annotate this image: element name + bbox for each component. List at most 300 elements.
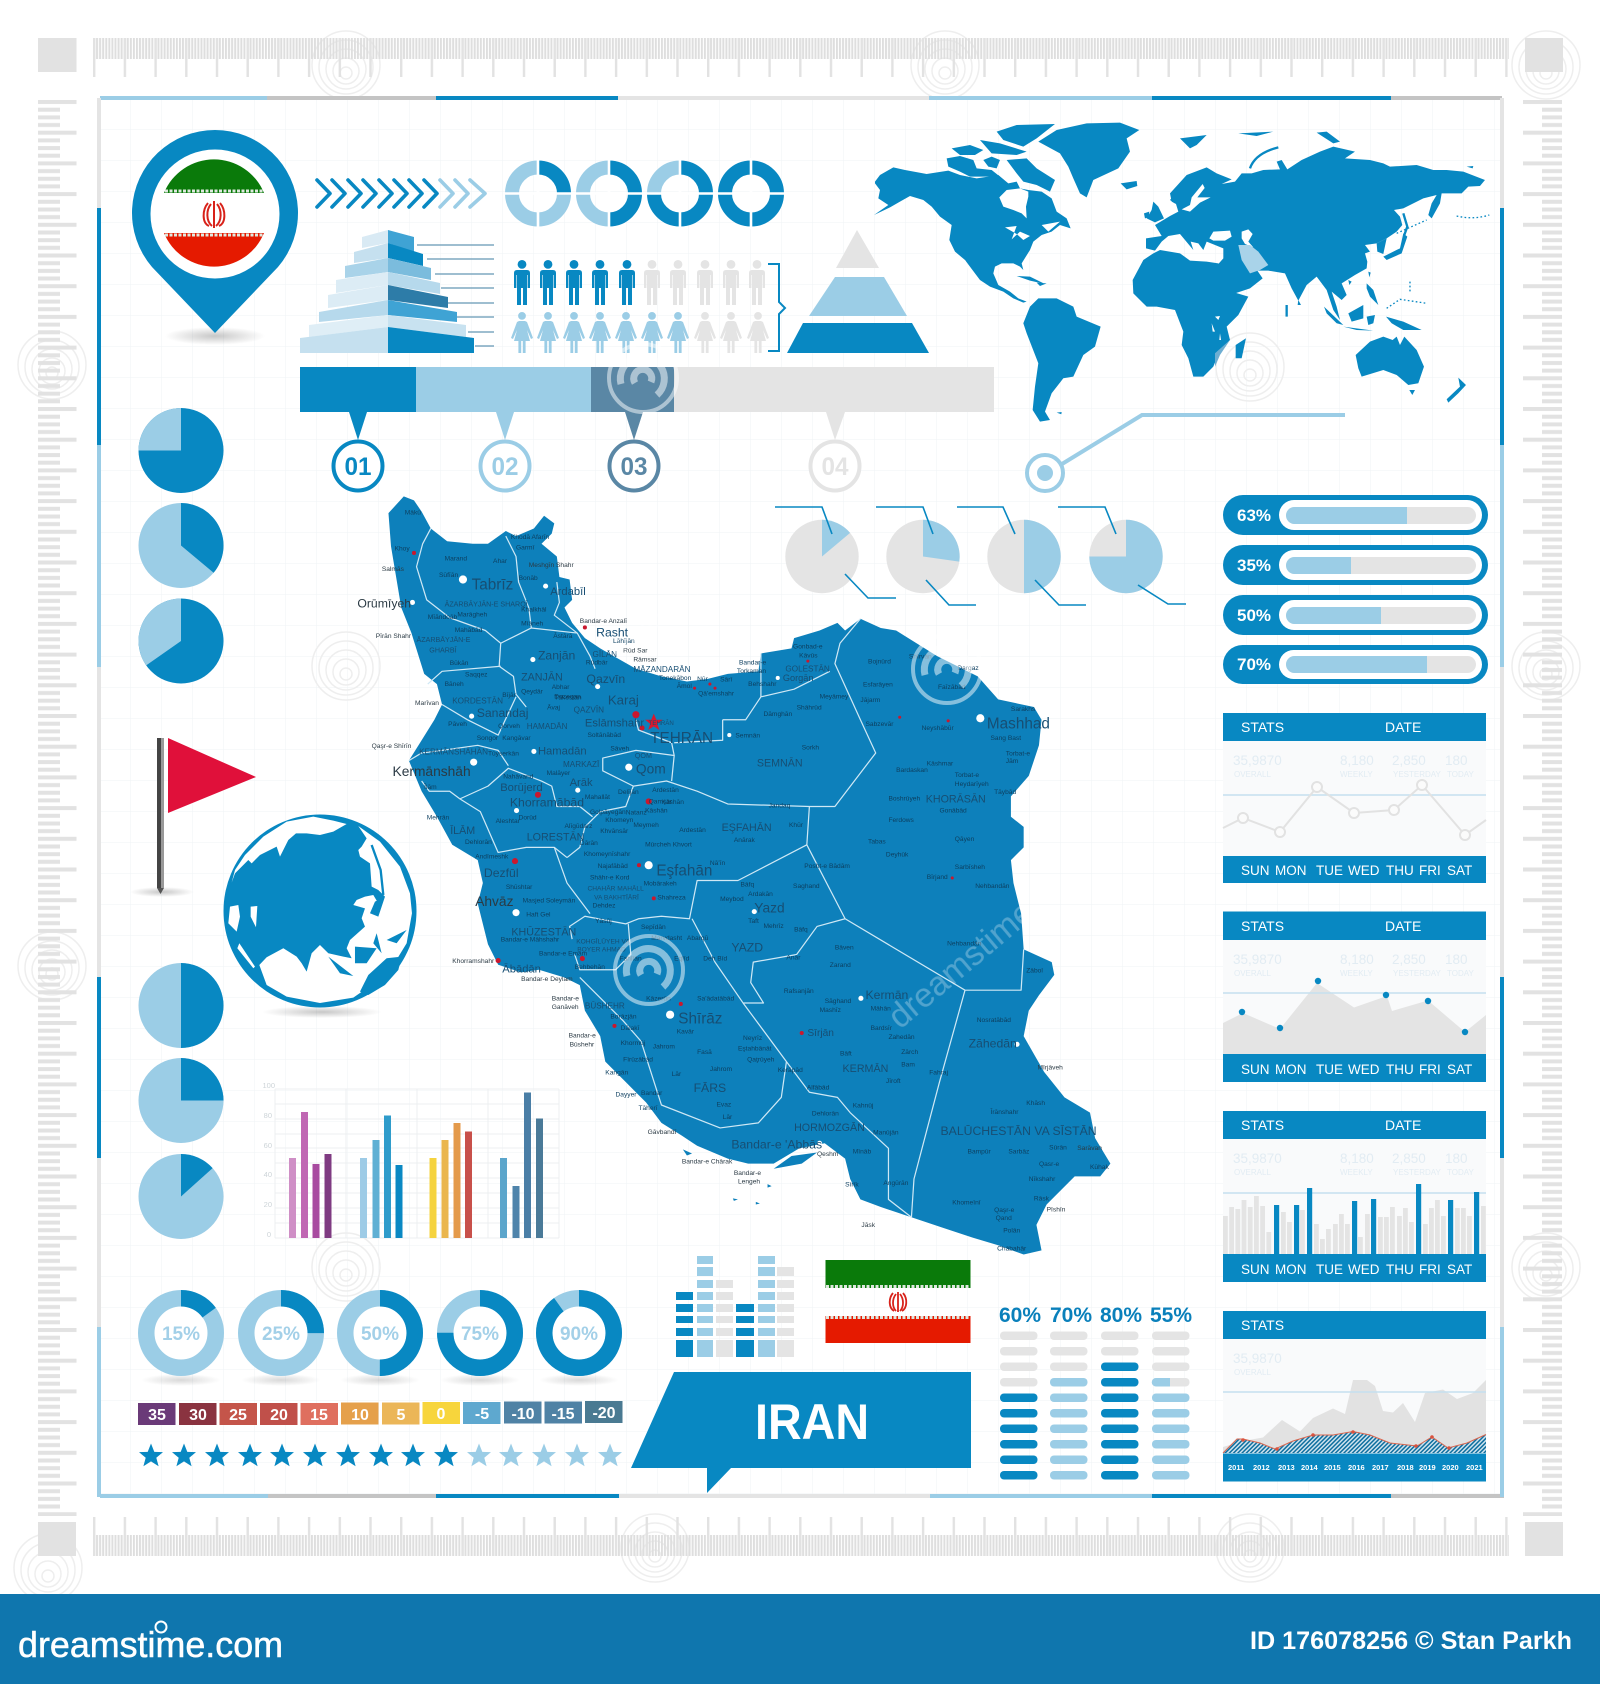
stats panel 2: area chart: TUE <box>1316 1062 1343 1077</box>
small town labels: Āmol <box>677 682 692 690</box>
small town labels: Kerāpād <box>778 1067 803 1074</box>
province labels: QOM <box>635 752 652 760</box>
small town labels: Khāsh <box>1026 1100 1045 1107</box>
small town labels: Dorūd <box>519 814 537 821</box>
city labels outside the map: Mīrjāveh <box>1037 1064 1063 1071</box>
small town labels: Marand <box>445 556 467 563</box>
city labels outside the map <box>357 562 1102 1229</box>
small town labels: Sarbāz <box>1008 1148 1029 1155</box>
small town labels: Qāyen <box>955 836 975 843</box>
temperature scale chips: 0 <box>437 1406 446 1423</box>
province labels: ĀZARBĀYJĀN-E SHARQĪ <box>445 601 528 609</box>
small town labels: Pāveh <box>448 721 467 728</box>
small town labels: Jahrom <box>710 1066 732 1073</box>
stats panel 4: yearly area chart: 2012 <box>1253 1463 1270 1472</box>
seas <box>1182 184 1253 340</box>
major city labels: Hamadān <box>538 745 587 757</box>
small town labels: Songor <box>477 735 499 742</box>
stats panel 1: line chart: SUN <box>1241 863 1270 878</box>
small town labels: Dālakī <box>621 1025 640 1032</box>
small town labels: Sūrān <box>1049 1144 1067 1151</box>
small town labels: Sarbīsheh <box>955 864 985 871</box>
target callout line <box>1027 415 1345 491</box>
city labels outside the map: Bandar-e Deylam <box>521 976 573 983</box>
cities: white dots <box>410 575 1020 1146</box>
small town labels: Zarand <box>830 962 851 969</box>
small town labels: Bandar-e <box>739 660 767 667</box>
stats panel 2: area chart: THU <box>1386 1062 1414 1077</box>
city labels outside the map: Rūd Sar <box>623 647 648 654</box>
small town labels: Marvdasht <box>651 935 682 942</box>
city labels outside the map: Orūmīyeh <box>357 597 411 611</box>
stats panel 1: line chart: WEEKLY <box>1340 770 1373 779</box>
province labels: ZANJĀN <box>521 672 563 684</box>
city labels outside the map: Marīvan <box>415 700 439 707</box>
south america <box>1023 298 1101 422</box>
small town labels: Angūrān <box>883 1180 909 1187</box>
small town labels: Qeydār <box>521 688 544 695</box>
major city labels: Zāhedān <box>969 1036 1017 1050</box>
major city labels: Gorgān <box>783 673 813 683</box>
small town labels: Khomeyn <box>605 817 634 824</box>
small town labels: Khormūj <box>621 1040 646 1047</box>
small town labels: Khūr <box>789 822 804 829</box>
greenland <box>1038 123 1139 197</box>
city labels outside the map: Pīshīn <box>1047 1207 1066 1214</box>
stats panel 4: yearly area chart <box>1223 1311 1486 1482</box>
stats panel 3: bar chart: TODAY <box>1447 1168 1474 1177</box>
small town labels: Anārak <box>734 837 756 844</box>
stats panel 1: line chart: 35,9870 <box>1233 753 1282 768</box>
small town labels: Boshrūyeh <box>888 795 920 802</box>
temperature scale chips: -15 <box>551 1406 575 1423</box>
small town labels: Zābol <box>1026 967 1043 974</box>
stats panel 4: yearly area chart: OVERALL <box>1234 1368 1271 1377</box>
city labels outside the map: Kermānshāh <box>393 764 471 779</box>
stats panel 1: line chart: OVERALL <box>1234 770 1271 779</box>
stats panel 1: line chart: WED <box>1348 863 1380 878</box>
stats panel 3: bar chart: 180 <box>1445 1151 1468 1166</box>
stats panel 3: bar chart: MON <box>1275 1262 1306 1277</box>
small town labels: Ferdows <box>888 817 915 824</box>
column chart: 40 <box>264 1170 272 1179</box>
small town labels: Dayyer <box>616 1091 637 1098</box>
hudson bay and lakes <box>964 188 1060 275</box>
small town labels: Mīāndoāb <box>428 614 458 621</box>
australia and islands <box>360 957 402 995</box>
province labels: HAMADĀN <box>527 721 568 731</box>
province labels: KORDESTĀN <box>452 695 503 705</box>
stats panel 1: line chart: TODAY <box>1447 770 1474 779</box>
small town labels: Ardestān <box>652 787 679 794</box>
major city labels: Qazvīn <box>586 672 625 686</box>
major city labels: Sīrjān <box>807 1028 834 1039</box>
major city labels: Rasht <box>596 626 629 640</box>
arctic ocean <box>232 817 347 883</box>
stats panel 2: area chart: SAT <box>1447 1062 1472 1077</box>
stats panel 3: bar chart <box>1223 1111 1486 1282</box>
small town labels: Bāneh <box>445 681 464 688</box>
small town labels: Mehrīz <box>763 923 784 930</box>
province labels: QAZVĪN <box>574 705 604 715</box>
small town labels: Eqlīd <box>674 956 690 963</box>
small town labels: Tāherī <box>638 1105 658 1112</box>
small town labels: Mehrān <box>427 814 450 821</box>
city labels outside the map: Qaşr-e Shīrīn <box>372 743 412 750</box>
small town labels: Lār <box>672 1071 682 1078</box>
city labels outside the map: Salmās <box>382 566 405 573</box>
stats panel 2: area chart: 180 <box>1445 952 1468 967</box>
major city labels: Eslāmshahr <box>585 717 644 729</box>
small town labels: Sabzevār <box>866 721 894 728</box>
stats panel 1: line chart: MON <box>1275 863 1306 878</box>
small town labels: Yāsūj <box>595 918 612 925</box>
small town labels: Meymeh <box>633 822 659 829</box>
stats panel 3: bar chart: DATE <box>1385 1117 1421 1133</box>
percentage donuts: 15% <box>162 1324 200 1345</box>
small town labels: Mīāneh <box>521 620 544 627</box>
small town labels: Jahrom <box>653 1043 675 1050</box>
stats panel 4: yearly area chart: 2011 <box>1228 1463 1244 1472</box>
stats panel 3: bar chart: YESTERDAY <box>1393 1168 1442 1177</box>
temperature scale chips: -10 <box>511 1406 535 1423</box>
small town labels: Fahlīān <box>620 956 642 963</box>
small town labels: Zahedān <box>888 1034 915 1041</box>
small town labels: Dargaz <box>957 665 979 672</box>
marker 02: 02 <box>492 453 518 481</box>
small town labels: Andīmeshk <box>475 854 509 861</box>
small town labels: Heydarīyeh <box>955 781 989 788</box>
stats panel 4: yearly area chart: 2017 <box>1372 1463 1389 1472</box>
major city labels: Tabrīz <box>472 577 513 594</box>
small town labels: Dāmghān <box>763 711 793 718</box>
mini pie charts with leaders <box>775 507 1186 605</box>
pyramid leader lines <box>417 245 494 346</box>
progress pills <box>1223 495 1488 684</box>
major city labels: Zanjān <box>538 649 576 663</box>
watermark overlays <box>607 344 1041 1036</box>
city labels outside the map: Khorramshahr <box>452 958 495 965</box>
city labels outside the map: Bandar-e Anzalī <box>580 618 627 625</box>
city labels outside the map: Būshehr <box>570 1041 595 1048</box>
small town labels: Qorveh <box>498 723 520 730</box>
small town labels: Behbehān <box>575 964 605 971</box>
triangle pyramid <box>787 230 929 353</box>
stats panel 1: line chart: 180 <box>1445 753 1468 768</box>
right ruler <box>1523 100 1562 1516</box>
temperature scale chips <box>138 1401 622 1425</box>
province labels: MARKAZĪ <box>563 759 600 769</box>
stats panel 4: yearly area chart: 2016 <box>1348 1463 1365 1472</box>
temperature scale chips: 15 <box>310 1407 328 1424</box>
stats panel 3: bar chart: STATS <box>1241 1117 1284 1133</box>
small town labels: Sarakhs <box>1011 706 1036 713</box>
small town labels: Qand <box>996 1215 1012 1222</box>
small town labels: Būkān <box>450 660 469 667</box>
stats panel 1: line chart: FRI <box>1419 863 1441 878</box>
small town labels: Ahar <box>493 558 508 565</box>
small town labels: Bījār <box>502 692 517 699</box>
stats panel 4: yearly area chart: 2020 <box>1442 1463 1459 1472</box>
province labels: MĀZANDARĀN <box>633 664 691 674</box>
people icons <box>511 260 785 353</box>
temperature scale chips: 35 <box>148 1407 166 1424</box>
frame border <box>97 96 1504 1498</box>
small town labels: Nosratābād <box>977 1017 1011 1024</box>
province labels: KERMĀNSHĀHĀN <box>419 746 488 756</box>
watermark overlays: dreamstime <box>607 563 720 665</box>
small town labels: Alīgūdarz <box>564 823 592 830</box>
small town labels: Abhar <box>552 684 570 691</box>
small town labels: Jām <box>1006 758 1019 765</box>
temperature scale chips: 25 <box>229 1407 247 1424</box>
chevron arrows <box>317 180 485 207</box>
province borders <box>409 528 1024 1217</box>
small town labels: Īrānshahr <box>991 1108 1019 1116</box>
major city labels <box>472 577 1050 1151</box>
stats panel 1: line chart: DATE <box>1385 719 1421 735</box>
mozambique tint <box>1215 340 1230 367</box>
column chart <box>262 1081 559 1239</box>
small town labels: Dehlorān <box>465 839 492 846</box>
stats panel 4: yearly area chart: 2018 <box>1397 1463 1414 1472</box>
province labels: KHŪZESTĀN <box>511 927 576 939</box>
small town labels: Behshahr <box>748 681 777 688</box>
small town labels: Jandaq <box>769 803 791 810</box>
small town labels: Polān <box>1003 1228 1021 1235</box>
small town labels: Dozeqan <box>554 693 581 700</box>
small town labels: Kāzerūn <box>646 995 671 1002</box>
province labels: GOLESTĀN <box>785 663 830 673</box>
small town labels: Bāfq <box>794 927 808 934</box>
small town labels: Mashīz <box>820 1007 841 1014</box>
icon: flag emblem small <box>890 1292 906 1312</box>
city labels outside the map: Rāmsar <box>633 657 657 664</box>
small town labels: Manūjān <box>873 1130 899 1137</box>
small town labels: Posht-e Bādām <box>804 863 850 870</box>
small town labels: Masjed Soleymān <box>523 897 576 904</box>
temperature scale chips: -20 <box>592 1405 616 1422</box>
stats panel 2: area chart: 2,850 <box>1392 952 1426 967</box>
pill 63% <box>1223 495 1488 535</box>
footer bar <box>0 1594 1600 1684</box>
stats panel 4: yearly area chart: 35,9870 <box>1233 1351 1282 1366</box>
province labels <box>417 601 1097 1138</box>
small town labels: Ardestān <box>679 827 706 834</box>
city labels outside the map: Ganāveh <box>552 1004 579 1011</box>
small town labels: Meyāmey <box>820 693 849 700</box>
small town labels: Kāshān <box>661 799 684 806</box>
column chart: 60 <box>264 1141 272 1150</box>
background grid panel <box>100 99 1501 1495</box>
small town labels: Sārī <box>720 677 732 684</box>
small town labels: Qaşr-e <box>994 1207 1015 1214</box>
iceland <box>1121 181 1137 189</box>
small town labels: Natanz <box>626 810 647 817</box>
small town labels: Khalkhāl <box>521 607 547 614</box>
six pie charts on the left <box>138 408 224 1239</box>
province labels: BALŪCHESTĀN VA SĪSTĀN <box>941 1124 1097 1138</box>
marker 01 <box>334 442 382 490</box>
iran title banner: IRAN <box>755 1394 869 1450</box>
small town labels: Khomeīnī <box>952 1199 981 1206</box>
percentage donuts: 50% <box>361 1324 399 1345</box>
left ruler <box>38 100 77 1516</box>
temperature scale chips: -5 <box>475 1406 489 1423</box>
small town labels: Lāhījān <box>613 638 635 645</box>
small town labels: Bardaskan <box>896 767 928 774</box>
small town labels: Kāshān <box>645 808 668 815</box>
small town labels: Kangāvar <box>502 735 531 742</box>
province labels: FĀRS <box>694 1081 726 1095</box>
city labels outside the map: Bandar-e <box>552 995 579 1002</box>
small town labels: Kūhak <box>1090 1164 1109 1171</box>
small town labels: Saghand <box>793 883 820 890</box>
globe <box>224 814 416 1018</box>
small town labels: Sūfīān <box>439 572 458 579</box>
percentage donuts: 25% <box>262 1324 300 1345</box>
iran map <box>357 496 1110 1254</box>
small town labels: Eştahbānāt <box>738 1045 772 1052</box>
star rating row <box>139 1444 622 1466</box>
small town labels: Māhān <box>871 1006 891 1013</box>
small town labels: Āstārā <box>553 632 573 640</box>
percentage columns: 60% <box>999 1304 1041 1327</box>
small town labels: Mahābād <box>455 627 483 634</box>
stats panel 3: bar chart: TUE <box>1316 1262 1343 1277</box>
stats panel 4: yearly area chart: 2015 <box>1324 1463 1341 1472</box>
small town labels: Bāven <box>835 944 854 951</box>
small town labels: Shīrvān <box>909 654 932 661</box>
stats panel 2: area chart: OVERALL <box>1234 969 1271 978</box>
pill 70% <box>1223 645 1488 684</box>
small town labels: Torbat-e <box>955 772 979 779</box>
small town labels: Mūrcheh Khvort <box>645 841 692 848</box>
temperature scale chips: 5 <box>397 1407 406 1424</box>
stats panel 1: line chart: THU <box>1386 863 1414 878</box>
pacific and indian oceans <box>259 826 412 1003</box>
stats panel 2: area chart: 35,9870 <box>1233 952 1282 967</box>
column chart: 20 <box>264 1200 272 1209</box>
small town labels: Sāghand <box>825 998 852 1005</box>
small town labels: Bardsīr <box>871 1025 893 1032</box>
stats panel 2: area chart: 8,180 <box>1340 952 1374 967</box>
column chart: 100 <box>262 1081 275 1090</box>
province labels: VA BAKHTĪĀRĪ <box>594 893 639 901</box>
percentage columns: 55% <box>1150 1304 1192 1327</box>
stepped pyramid <box>300 230 494 353</box>
major city labels: Eşfahān <box>656 862 712 879</box>
small town labels: Mīnāb <box>853 1148 871 1155</box>
small town labels: Borāzjān <box>610 1013 637 1020</box>
small town labels: Īlām <box>424 783 437 791</box>
temperature scale chips: 10 <box>351 1407 369 1424</box>
stats panel 3: bar chart: WEEKLY <box>1340 1168 1373 1177</box>
small town labels: Aleshtar <box>496 818 521 825</box>
stats panel 1: line chart: YESTERDAY <box>1393 770 1442 779</box>
stats panel 1: line chart: 2,850 <box>1392 753 1426 768</box>
location pin with Iran flag <box>132 130 298 345</box>
marker 04 <box>810 442 860 490</box>
major city labels: Karaj <box>608 692 639 707</box>
africa <box>1133 250 1248 377</box>
stats panel 4: yearly area chart: 2019 <box>1419 1463 1436 1472</box>
north america <box>874 167 1071 303</box>
province labels: BOYER AHMAD <box>577 946 626 953</box>
small town labels: Marāgheh <box>457 612 487 619</box>
small town labels: Bāfq <box>741 882 754 889</box>
small town labels: Deyhūk <box>886 852 909 859</box>
major city labels: Sanandaj <box>477 706 528 720</box>
small town labels: Golpāyegān <box>590 809 626 816</box>
province labels: KERMĀN <box>843 1063 888 1075</box>
stats panel 2: area chart: DATE <box>1385 918 1421 934</box>
iran title banner <box>631 1372 971 1493</box>
caribbean and british isles <box>1017 188 1180 414</box>
pill 70%: 70% <box>1237 655 1271 674</box>
small town labels: Qā'emshahr <box>698 690 735 697</box>
small town labels: Abarqū <box>687 935 709 942</box>
small town labels: Delījān <box>618 789 639 796</box>
small town labels: Kahnūj <box>853 1103 874 1110</box>
small town labels: Chābahār <box>997 1245 1027 1252</box>
province labels: KHORĀSĀN <box>926 793 986 805</box>
small town labels: Kavār <box>677 1029 695 1036</box>
major city labels: Mashhad <box>987 715 1050 732</box>
four ring charts <box>503 158 786 229</box>
province labels: BŪSHEHR <box>585 1001 625 1011</box>
stats panel 3: bar chart: 2,850 <box>1392 1151 1426 1166</box>
small town labels: Sang Bast <box>991 735 1021 742</box>
small town labels: Bandar <box>641 1090 663 1097</box>
small town labels: Haft Gel <box>526 912 551 919</box>
old world <box>1133 132 1489 403</box>
islands <box>683 1149 817 1204</box>
stats panel 2: area chart: TODAY <box>1447 969 1474 978</box>
province labels: TEHRĀN <box>649 720 674 727</box>
city labels outside the map: Gāvbandī <box>648 1129 677 1136</box>
small town labels: Faīzābād <box>938 684 966 691</box>
stats panel 2: area chart <box>1223 912 1486 1082</box>
small town labels: Sepīdān <box>641 924 666 931</box>
small town labels: Dārān <box>580 840 598 847</box>
stats panel 1: line chart: SAT <box>1447 863 1472 878</box>
small town labels: Bandar-e Emām <box>539 951 588 958</box>
percentage columns: 80% <box>1100 1304 1142 1327</box>
stats panel 2: area chart: STATS <box>1241 918 1284 934</box>
pill 63%: 63% <box>1237 506 1271 525</box>
small town labels: Gonābād <box>939 808 967 815</box>
small town labels: Torkaman <box>737 668 766 675</box>
stats panel 1: line chart: 8,180 <box>1340 753 1374 768</box>
bottom ruler <box>93 1517 1509 1556</box>
temperature scale chips: 20 <box>270 1407 288 1424</box>
column chart: 0 <box>267 1230 271 1239</box>
stats panel 3: bar chart: WED <box>1348 1262 1380 1277</box>
major city labels: Ardabīl <box>550 586 586 598</box>
small town labels: Evaz <box>717 1102 731 1109</box>
small town labels: Mākū <box>405 510 421 517</box>
stats panel 4: yearly area chart: 2021 <box>1466 1463 1483 1472</box>
eurasia <box>1146 147 1485 320</box>
small town labels: Nūr <box>697 676 709 683</box>
small town labels: Bandar-e Māhshahr <box>501 937 560 944</box>
small town labels: Mahallāt <box>585 794 610 801</box>
stats panel 4: yearly area chart: 2013 <box>1278 1463 1295 1472</box>
small town labels: Qamşar <box>649 798 673 805</box>
equalizer blocks <box>676 1256 794 1357</box>
major city labels: Dezfūl <box>484 866 519 880</box>
